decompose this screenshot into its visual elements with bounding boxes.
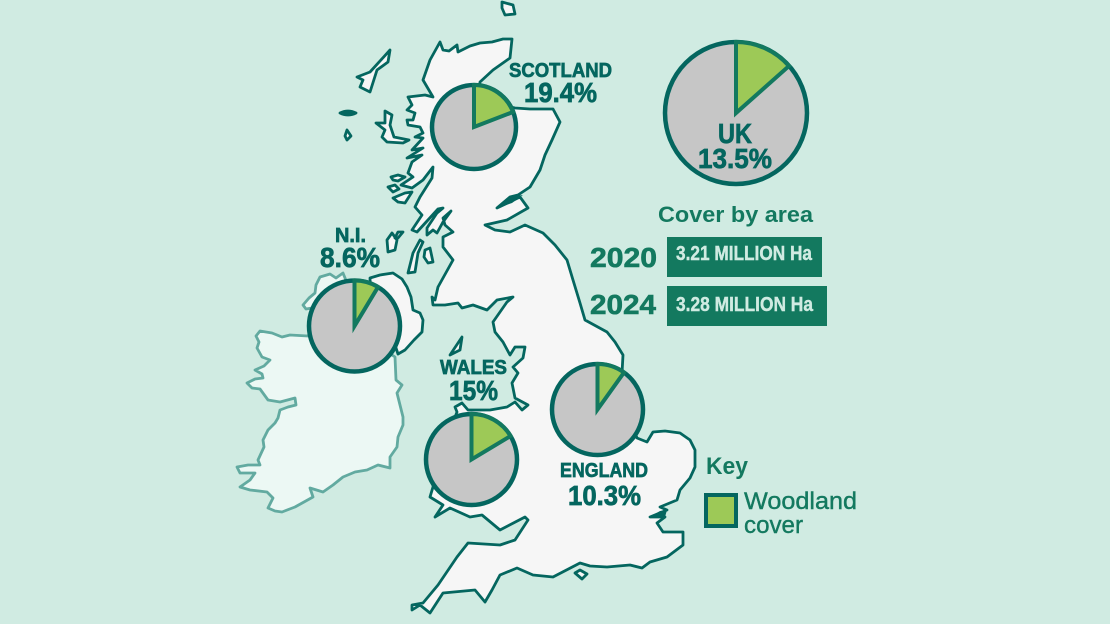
bar: 2024 value: 3.28 MILLION Ha <box>676 294 814 316</box>
year: 2020: 2020 <box>590 242 657 273</box>
map: Northern Ireland <box>370 273 423 354</box>
label: Wales: 15% <box>449 375 498 406</box>
bar: 2020 value: 3.21 MILLION Ha <box>676 243 813 265</box>
year: 2024: 2024 <box>590 289 656 320</box>
legend: key: cover <box>744 512 803 539</box>
map: Firth of Tay <box>497 195 523 208</box>
label: England <box>560 460 648 511</box>
pie: England <box>552 364 643 455</box>
label: England: 10.3% <box>568 480 641 511</box>
pie: Northern Ireland <box>309 280 400 372</box>
legend: key: Woodland <box>744 488 857 515</box>
label: England: ENGLAND <box>560 460 648 482</box>
label: UK: 13.5% <box>698 143 772 174</box>
pie: Scotland <box>432 85 516 169</box>
bar: 2024 value <box>667 286 827 326</box>
label: Scotland: SCOTLAND <box>509 60 612 82</box>
map: Republic of Ireland <box>237 273 403 512</box>
pie: UK <box>665 42 807 184</box>
map: Thames estuary <box>650 510 667 517</box>
bar: 2020 value <box>667 237 822 277</box>
map: islands <box>340 2 587 579</box>
legend: key <box>706 453 857 539</box>
label: Northern Ireland: N.I. <box>335 225 366 247</box>
label: Scotland <box>509 60 612 108</box>
heading: cover by area: Cover by area <box>658 202 813 227</box>
label: Wales <box>440 357 507 406</box>
label: Northern Ireland <box>320 225 380 273</box>
map: Great Britain mainland <box>401 39 695 613</box>
legend: key: Key <box>706 453 749 480</box>
pie: Wales <box>426 414 517 505</box>
label: Wales: WALES <box>440 357 507 379</box>
label: Scotland: 19.4% <box>524 77 597 108</box>
label: UK: UK <box>718 118 752 149</box>
label: Northern Ireland: 8.6% <box>320 242 380 273</box>
label: UK <box>698 118 772 174</box>
